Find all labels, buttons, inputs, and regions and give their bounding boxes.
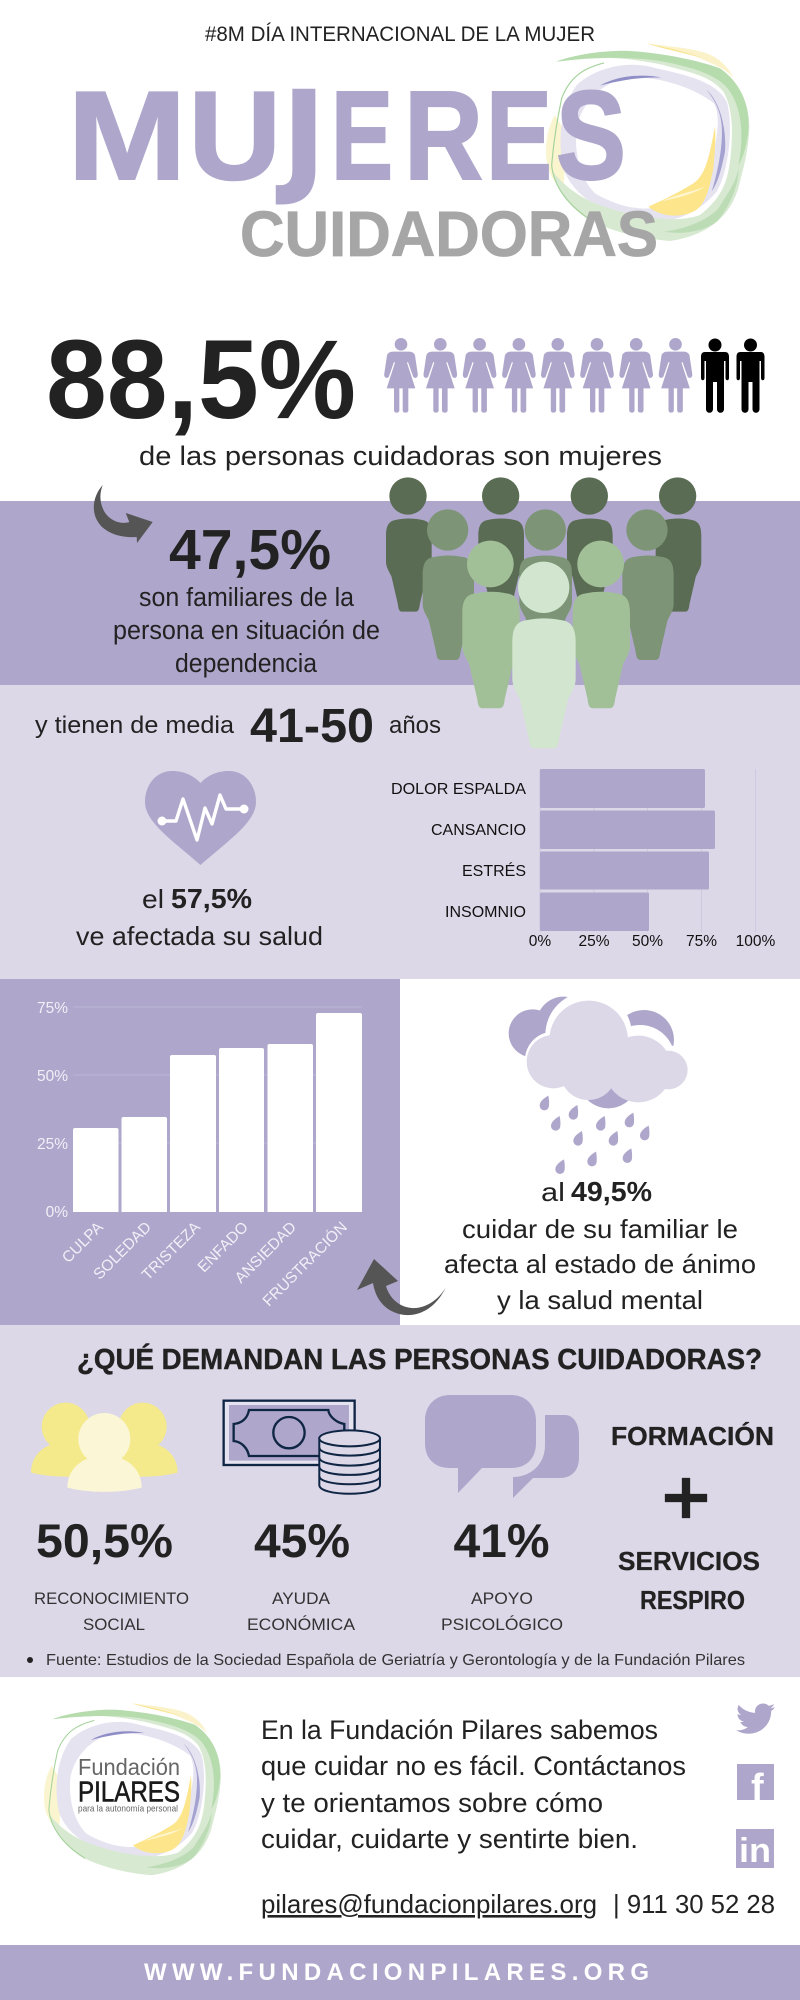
stat: ayuda economica: 45% <box>254 1514 350 1567</box>
text block: familiares: son familiares de la <box>139 584 355 612</box>
x axis labels: CULPA <box>59 1218 107 1267</box>
icon: speech bubbles <box>425 1395 579 1498</box>
text: 57,5% health: ve afectada su salud <box>76 921 323 951</box>
logo: Fundacion Pilares: PILARES <box>78 1776 180 1808</box>
arrow: curved down to 47,5% <box>94 485 153 543</box>
y axis labels: 75% <box>37 1000 68 1017</box>
panel: demands band <box>0 1325 800 1677</box>
text block: foundation message: que cuidar no es fácil. Contáctanos <box>261 1751 686 1781</box>
logo: Fundacion Pilares: para la autonomía personal <box>78 1804 178 1814</box>
text: formacion plus servicios respiro: SERVICIOS <box>618 1546 760 1576</box>
x axis labels: SOLEDAD <box>90 1219 155 1283</box>
axis labels: 25% <box>578 933 610 950</box>
heading: demands: ¿QUÉ DEMANDAN LAS PERSONAS CUIDADORAS? <box>77 1342 762 1376</box>
front row light figures <box>462 541 630 708</box>
columns <box>73 1013 362 1212</box>
icon: two men <box>701 338 764 413</box>
icon: facebook: f <box>751 1767 764 1809</box>
panel: light lilac health band <box>0 685 800 979</box>
x axis labels <box>59 1218 351 1310</box>
category labels <box>391 781 526 921</box>
text block: 49,5% mental health: cuidar de su familiar le <box>462 1214 738 1244</box>
title: mujeres: E <box>486 65 552 206</box>
title: mujeres: E <box>331 65 393 206</box>
axis labels <box>529 933 776 950</box>
contact line: | 911 30 52 28 <box>613 1889 775 1919</box>
axis labels: 50% <box>632 933 663 950</box>
text block: foundation message: En la Fundación Pilares sabemos <box>261 1715 658 1745</box>
front cloud <box>527 1001 688 1102</box>
icon: banknote and coins <box>224 1401 380 1494</box>
axis labels: 0% <box>529 933 551 950</box>
text block: 49,5% mental health: al <box>541 1177 565 1207</box>
column chart: emotions <box>37 1000 362 1310</box>
front center pale figure <box>512 562 576 748</box>
stat: apoyo psicologico: 41% <box>454 1514 550 1567</box>
title: mujeres <box>68 65 626 208</box>
stat: ayuda economica: AYUDA <box>272 1589 331 1608</box>
title: mujeres: J <box>277 66 325 208</box>
panel: dark lilac band <box>0 501 800 685</box>
category labels: DOLOR ESPALDA <box>391 781 526 798</box>
icon: heart with pulse <box>145 771 256 865</box>
stat: apoyo psicologico: APOYO <box>471 1589 533 1608</box>
back row dark figures <box>386 477 701 612</box>
stat: ayuda economica: ECONÓMICA <box>247 1615 356 1634</box>
text: age <box>35 700 441 753</box>
text: age: 41-50 <box>250 700 374 753</box>
footer website: WWW.FUNDACIONPILARES.ORG <box>144 1959 649 1986</box>
axis labels: 75% <box>686 933 717 950</box>
y axis labels: 25% <box>37 1136 68 1153</box>
bar chart: health symptoms <box>391 769 776 950</box>
panel: footer band <box>0 1945 800 2000</box>
category labels: ESTRÉS <box>462 861 526 880</box>
title: mujeres: R <box>404 65 483 206</box>
icon: twitter <box>736 1703 775 1734</box>
stat: 47,5%: 47,5% <box>169 518 331 582</box>
stat: reconocimiento social: 50,5% <box>36 1514 173 1567</box>
arrow: curved toward chart <box>357 1259 446 1315</box>
stat: reconocimiento social: SOCIAL <box>83 1615 145 1634</box>
text: formacion plus servicios respiro: FORMACIÓN <box>611 1421 774 1451</box>
icon: linkedin: in <box>739 1832 771 1870</box>
caption: 88,5% description: de las personas cuidadoras son mujeres <box>139 441 662 471</box>
rain drops <box>540 1096 649 1174</box>
text block: familiares: persona en situación de <box>113 617 380 645</box>
text: 57,5% health <box>76 883 323 951</box>
title: mujeres: S <box>556 65 626 206</box>
stat: 88,5%: 88,5% <box>46 317 356 442</box>
x axis labels: TRISTEZA <box>139 1218 204 1284</box>
category labels: CANSANCIO <box>431 822 526 839</box>
text block: 49,5% mental health <box>444 1176 756 1315</box>
text block: foundation message: cuidar, cuidarte y sentirte bien. <box>261 1824 638 1854</box>
icon: yellow group <box>31 1403 178 1492</box>
source note: Fuente: Estudios de la Sociedad Española de Geriatría y Gerontología y de la Fundación Pilares <box>46 1652 745 1669</box>
text block: foundation message <box>261 1715 686 1854</box>
stat: ayuda economica <box>247 1514 356 1634</box>
text block: 49,5% mental health: 49,5% <box>571 1176 652 1207</box>
logo: Fundacion Pilares: Fundación <box>78 1754 180 1780</box>
title: mujeres: M <box>68 65 186 206</box>
contact line <box>261 1889 775 1919</box>
x axis labels: ENFADO <box>195 1219 252 1276</box>
kicker heading: #8M DÍA INTERNACIONAL DE LA MUJER <box>205 23 595 46</box>
title: mujeres: U <box>188 65 281 206</box>
brush ring decoration <box>546 43 749 241</box>
cloud outline <box>525 992 693 1095</box>
icon: group of people <box>386 477 701 748</box>
panel: dark lilac emotions chart background <box>0 979 400 1325</box>
stat: reconocimiento social <box>34 1514 189 1634</box>
text block: 49,5% mental health: y la salud mental <box>497 1285 703 1315</box>
coins <box>319 1430 380 1494</box>
text block: foundation message: y te orientamos sobre cómo <box>261 1788 603 1818</box>
middle row figures <box>423 509 674 660</box>
text: age: años <box>389 712 441 739</box>
axis labels: 100% <box>736 933 776 950</box>
y axis labels: 50% <box>37 1068 68 1085</box>
icon: eight women <box>384 338 692 413</box>
y axis labels <box>37 1000 68 1221</box>
y axis labels: 0% <box>46 1204 68 1221</box>
x axis labels: FRUSTRACIÓN <box>260 1219 351 1310</box>
stat: reconocimiento social: RECONOCIMIENTO <box>34 1589 189 1608</box>
category labels: INSOMNIO <box>445 904 526 921</box>
logo: Fundacion Pilares <box>44 1703 221 1875</box>
contact line: pilares@fundacionpilares.org <box>261 1889 597 1919</box>
stat: apoyo psicologico: PSICOLÓGICO <box>441 1615 563 1634</box>
icon: pictogram of ten people <box>384 338 764 413</box>
text: formacion plus servicios respiro <box>611 1421 774 1615</box>
back cloud <box>509 997 674 1108</box>
bars <box>540 769 715 931</box>
text block: familiares: dependencia <box>175 650 318 678</box>
x axis labels: ANSIEDAD <box>232 1219 300 1287</box>
text: age: y tienen de media <box>35 712 234 739</box>
title: cuidadoras: CUIDADORAS <box>240 198 658 270</box>
stat: apoyo psicologico <box>441 1514 563 1634</box>
text: formacion plus servicios respiro: RESPIRO <box>640 1585 745 1615</box>
icon: facebook <box>737 1764 774 1809</box>
text block: 49,5% mental health: afecta al estado de ánimo <box>444 1249 756 1279</box>
text: 57,5% health: 57,5% <box>171 883 252 914</box>
text block: familiares <box>113 584 380 678</box>
text: 57,5% health: el <box>142 884 164 914</box>
icon: rain cloud <box>509 992 693 1174</box>
